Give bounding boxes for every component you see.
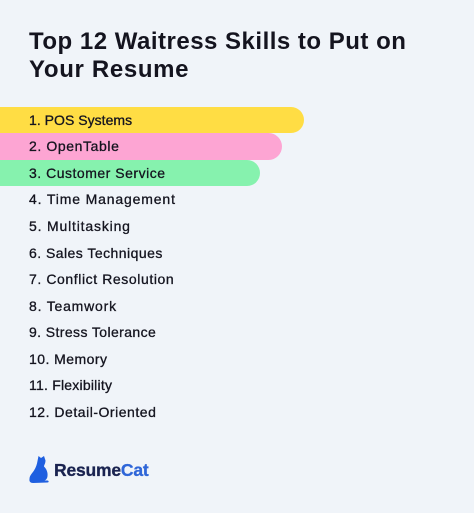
skill 10: 10. Memory: [29, 350, 107, 366]
skill 8: 8. Teamwork: [29, 298, 117, 314]
icon: cat silhouette: [29, 456, 49, 483]
title: Your Resume: [29, 56, 189, 82]
logo: ResumeCat: [29, 456, 149, 483]
bar: Customer Service: [0, 160, 260, 186]
skill 7: 7. Conflict Resolution: [29, 271, 174, 287]
title: Top 12 Waitress Skills to Put on: [29, 28, 406, 55]
bar: POS Systems: [0, 106, 304, 133]
bar: OpenTable: [0, 133, 282, 160]
skill 3: 3. Customer Service: [29, 164, 166, 180]
skill 5: 5. Multitasking: [29, 218, 131, 234]
skill 6: 6. Sales Techniques: [29, 244, 163, 260]
title: [29, 28, 406, 82]
skill 2: 2. OpenTable: [29, 138, 119, 154]
skill 9: 9. Stress Tolerance: [29, 324, 156, 340]
skill 12: 12. Detail-Oriented: [29, 404, 156, 420]
skill 4: 4. Time Management: [29, 191, 176, 207]
wordmark: ResumeCat: [54, 460, 148, 480]
skill 1: 1. POS Systems: [29, 112, 132, 128]
skill 11: 11. Flexibility: [29, 377, 112, 393]
